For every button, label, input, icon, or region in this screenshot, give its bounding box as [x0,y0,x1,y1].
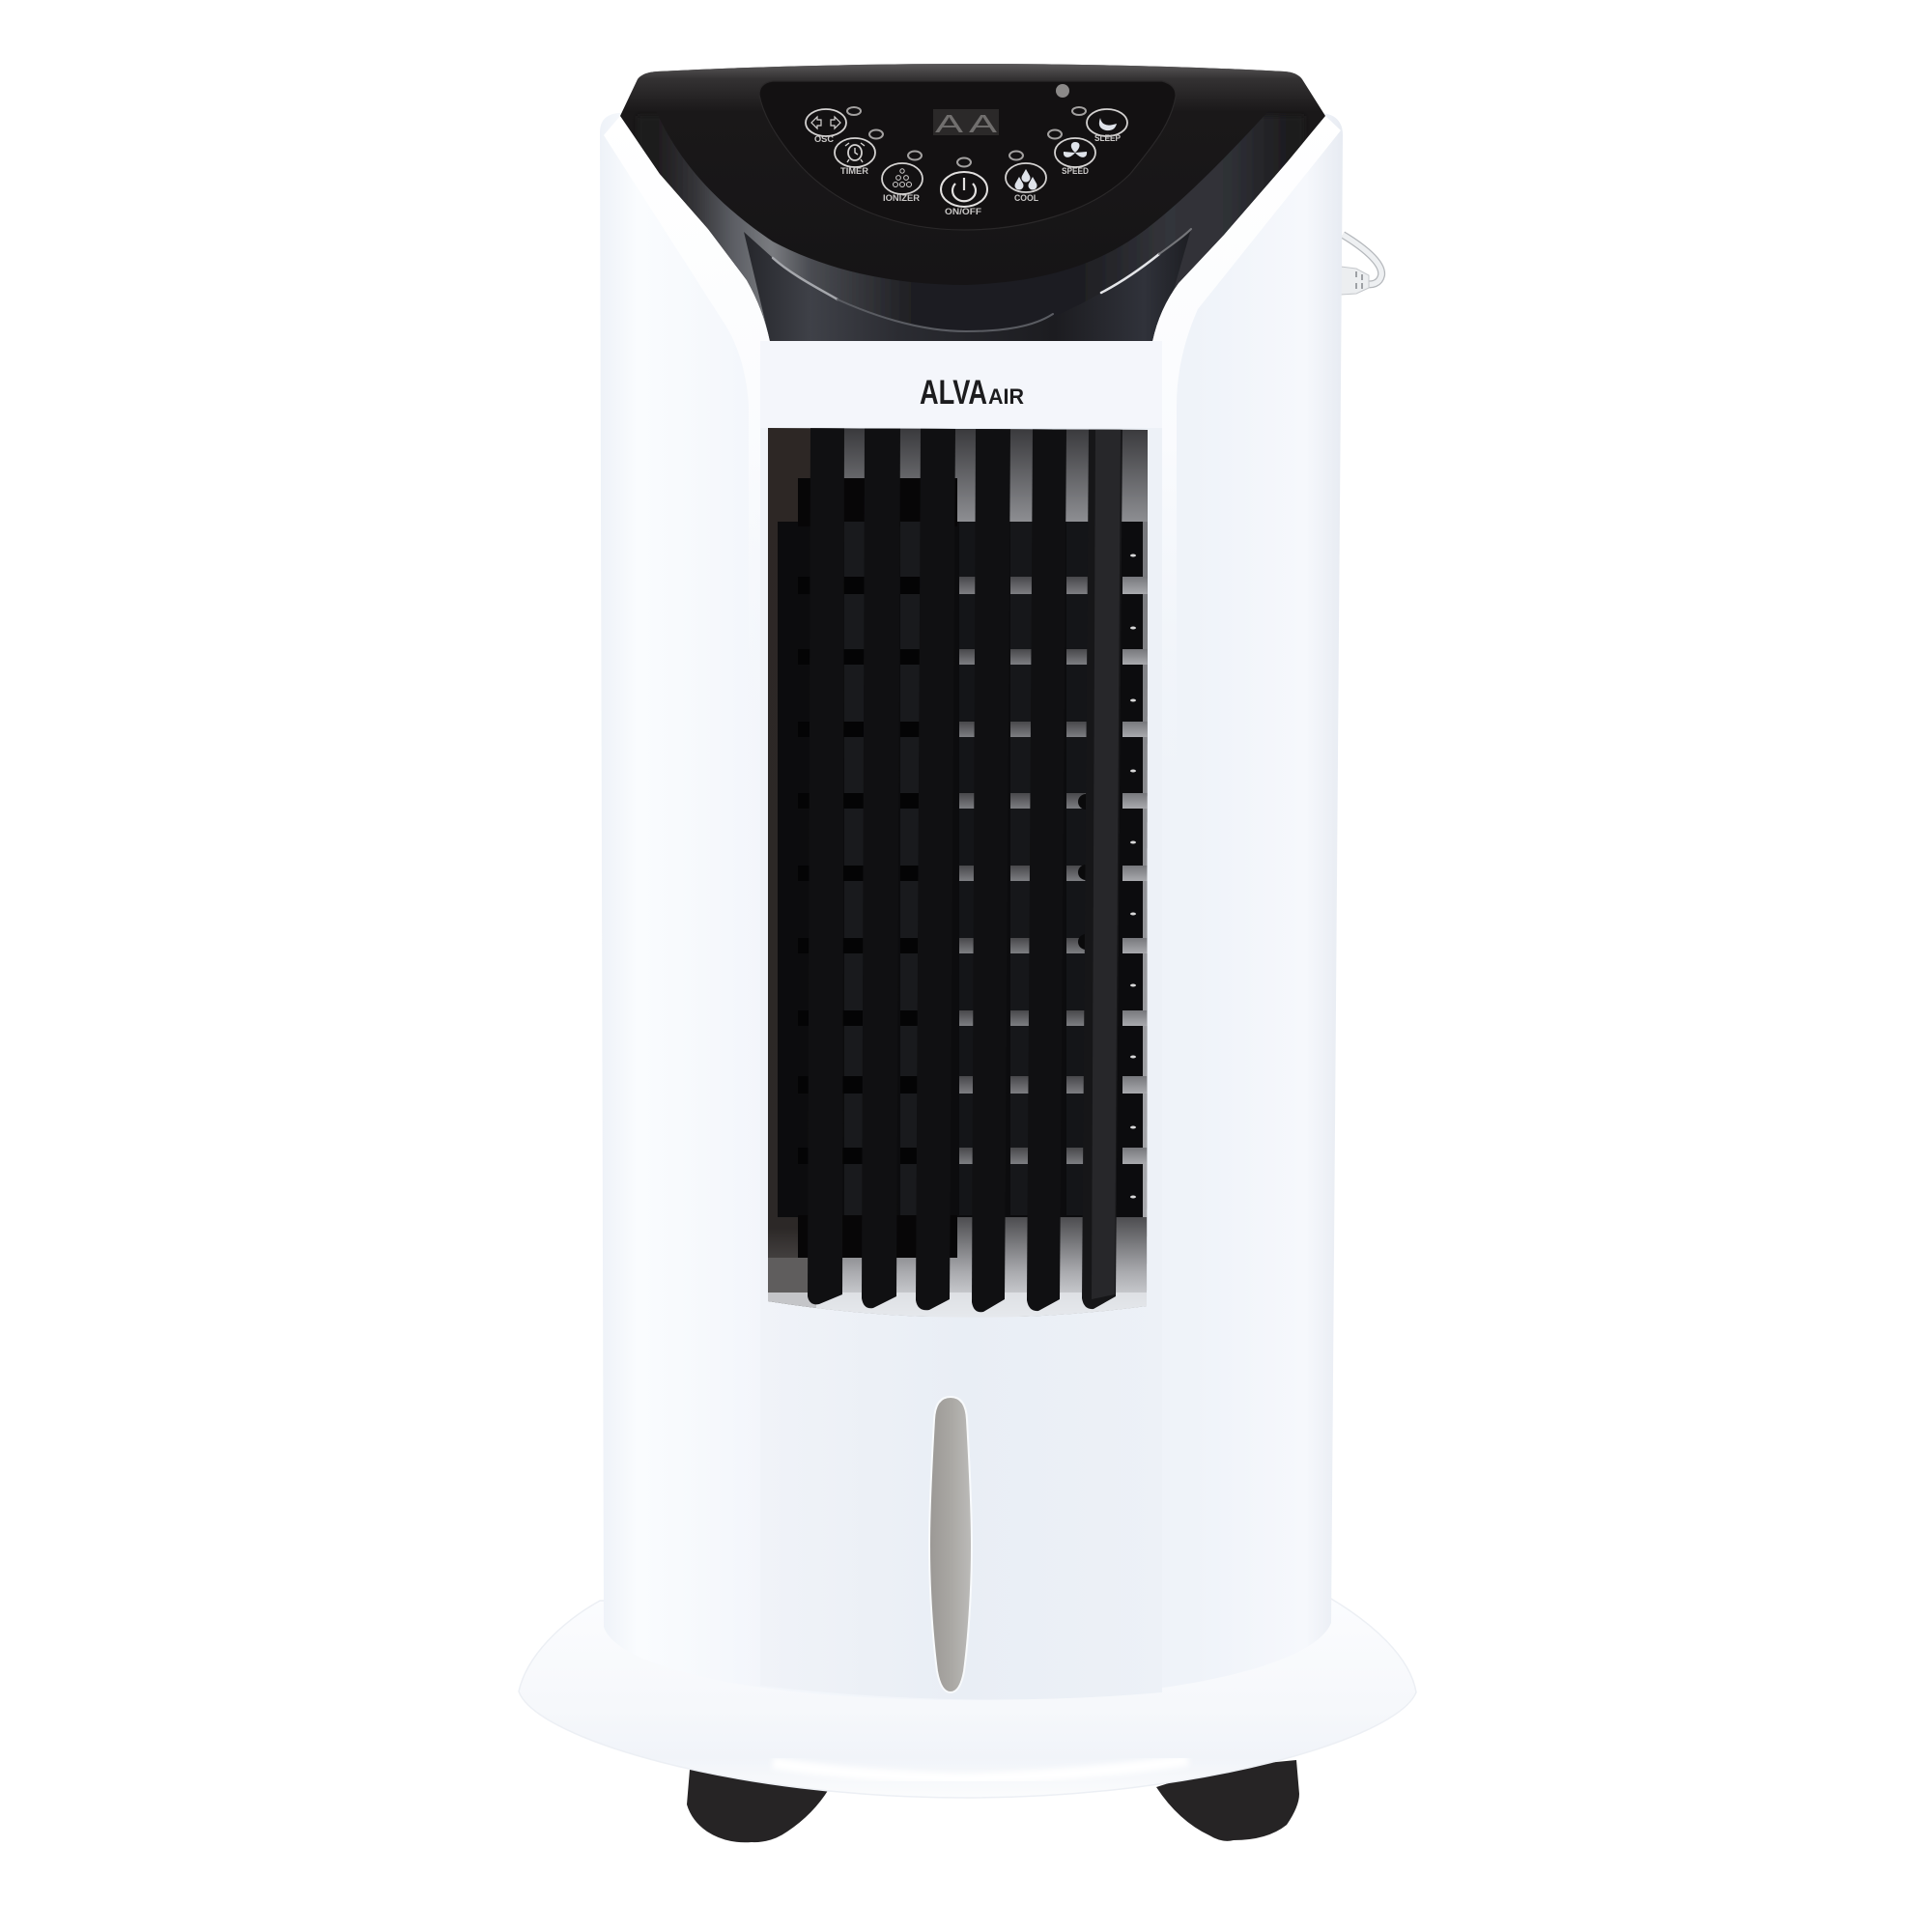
filter grid [778,478,1148,1258]
left wheel [687,1758,829,1842]
brand logo: AIR [988,384,1024,409]
hood highlights [773,229,1191,331]
button: IONIZER [882,163,923,204]
button: OSC: OSC [814,134,834,145]
button: SLEEP: SLEEP [1094,133,1122,144]
right edge openings [1122,577,1148,1164]
button: TIMER: TIMER [840,166,868,177]
side bevels [604,116,1341,773]
cord plug [1341,267,1369,295]
button: SLEEP [1087,109,1127,144]
intake background [768,428,1148,1317]
button: COOL [1006,163,1046,204]
hood gloss band [638,116,1304,341]
water tank handle [929,1397,972,1692]
button: ON/OFF: ON/OFF [945,207,981,217]
main body [600,113,1343,1700]
button: ON/OFF [941,172,987,217]
rear wheels [687,1758,1299,1842]
logo band [760,341,1162,428]
control panel [759,81,1176,230]
indicator LEDs [847,107,1086,166]
base lip highlights [773,1760,1188,1779]
brand logo: ALVA [920,374,987,412]
button: SPEED: SPEED [1062,166,1089,177]
LED display [933,109,999,138]
round notches [1078,794,1086,950]
air intake window [768,428,1154,1321]
black top hood [609,58,1343,348]
LED display: A [935,109,964,138]
grid notches [798,577,921,1164]
button: SPEED [1055,138,1095,177]
button: IONIZER: IONIZER [883,193,920,204]
product illustration: air cooler [518,64,1416,1843]
grid openings [959,577,1089,1164]
central dome [638,58,1304,285]
LED display: A [969,109,998,138]
rivet specks [1130,554,1136,1198]
button: TIMER [835,138,875,177]
front centre panel [760,338,1162,1700]
button: COOL: COOL [1014,193,1038,204]
button: OSC [806,109,846,145]
louvers [808,428,1122,1312]
sensor dot [1056,84,1069,98]
power cord [1341,235,1381,295]
hood lower band [744,229,1191,341]
right wheel [1156,1760,1299,1841]
base [519,1599,1416,1798]
